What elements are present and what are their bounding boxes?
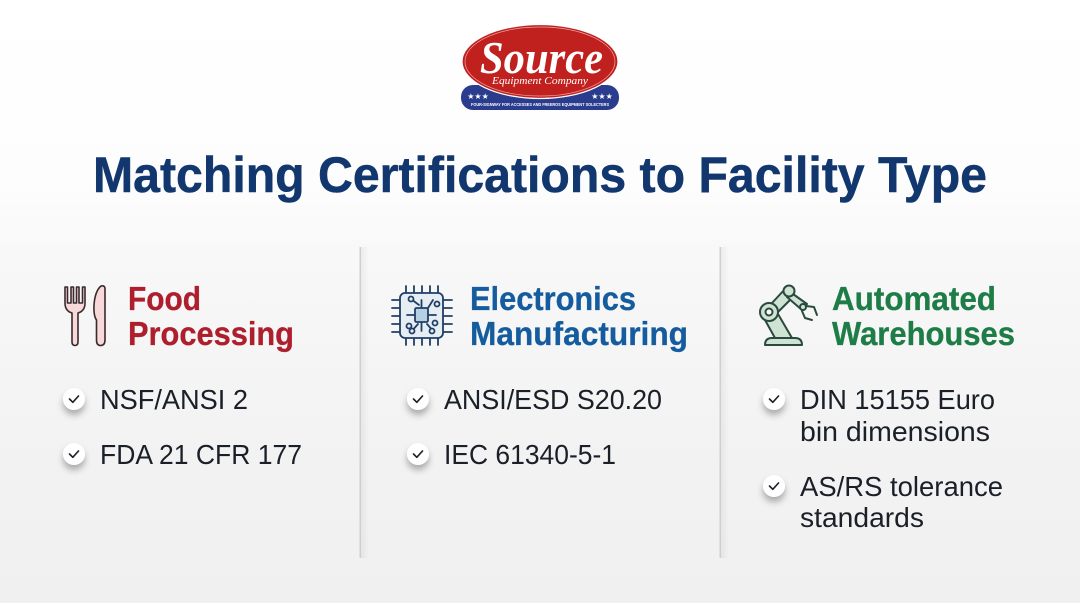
heading [128,280,294,352]
heading [832,280,1015,352]
logo: Source Equipment Company: ★★★ [467,92,489,101]
checklist [63,384,302,470]
checklist: IEC 61340-5-1 [444,439,616,470]
heading: Automated [832,280,996,317]
heading: Warehouses [832,315,1015,352]
checklist: DIN 15155 Euro [800,384,995,415]
logo: Source Equipment Company: Equipment Company [491,76,589,87]
checklist: standards [800,502,924,533]
checklist [763,384,1003,533]
logo: Source Equipment Company: ★★★ [591,92,613,101]
checklist: ANSI/ESD S20.20 [444,384,662,415]
panel: food processing [63,280,302,470]
heading: Food [128,280,201,317]
icon: robot arm [760,286,817,345]
checklist [407,384,662,470]
panel: electronics manufacturing [392,280,688,470]
heading: Electronics [470,280,636,317]
checklist: FDA 21 CFR 177 [100,439,302,470]
logo: Source Equipment Company: FOUR-SIGNWAY FOR ACCESSES AND FREEROS EQUIPMENT SOLECTERS [471,102,609,107]
title: Matching Certifications to Facility Type [93,147,987,203]
heading: Processing [128,315,294,352]
checklist: NSF/ANSI 2 [100,384,248,415]
checklist: bin dimensions [800,416,990,447]
checklist: AS/RS tolerance [800,471,1003,502]
logo: Source Equipment Company: Source [480,32,603,83]
icon: microchip [392,286,452,345]
heading: Manufacturing [470,315,688,352]
panel: automated warehouses [760,280,1015,533]
icon: fork and knife [65,286,105,346]
heading [470,280,688,352]
logo: Source Equipment Company [461,24,619,110]
